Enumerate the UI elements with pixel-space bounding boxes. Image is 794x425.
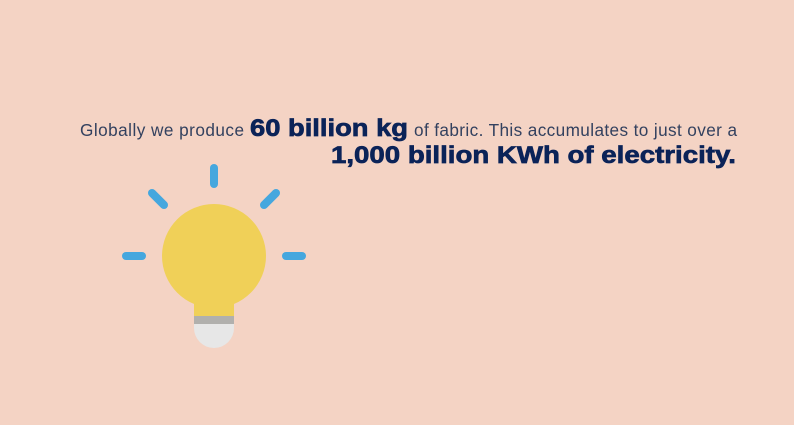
light rays [126,168,302,256]
text: 60 billion kg: 60 billion kg [250,115,408,142]
text: of fabric, accumulates to just over a: of fabric. This accumulates to just over a [414,120,737,140]
bulb base [194,324,234,348]
icon: light bulb [126,168,302,348]
bulb glass [162,204,266,317]
bulb collar [194,316,234,324]
text: 1,000 billion KWh of electricity: 1,000 billion KWh of electricity. [331,142,736,169]
text block: fabric and electricity statement [80,115,737,169]
text: Globally we produce: Globally we produce [80,120,244,140]
